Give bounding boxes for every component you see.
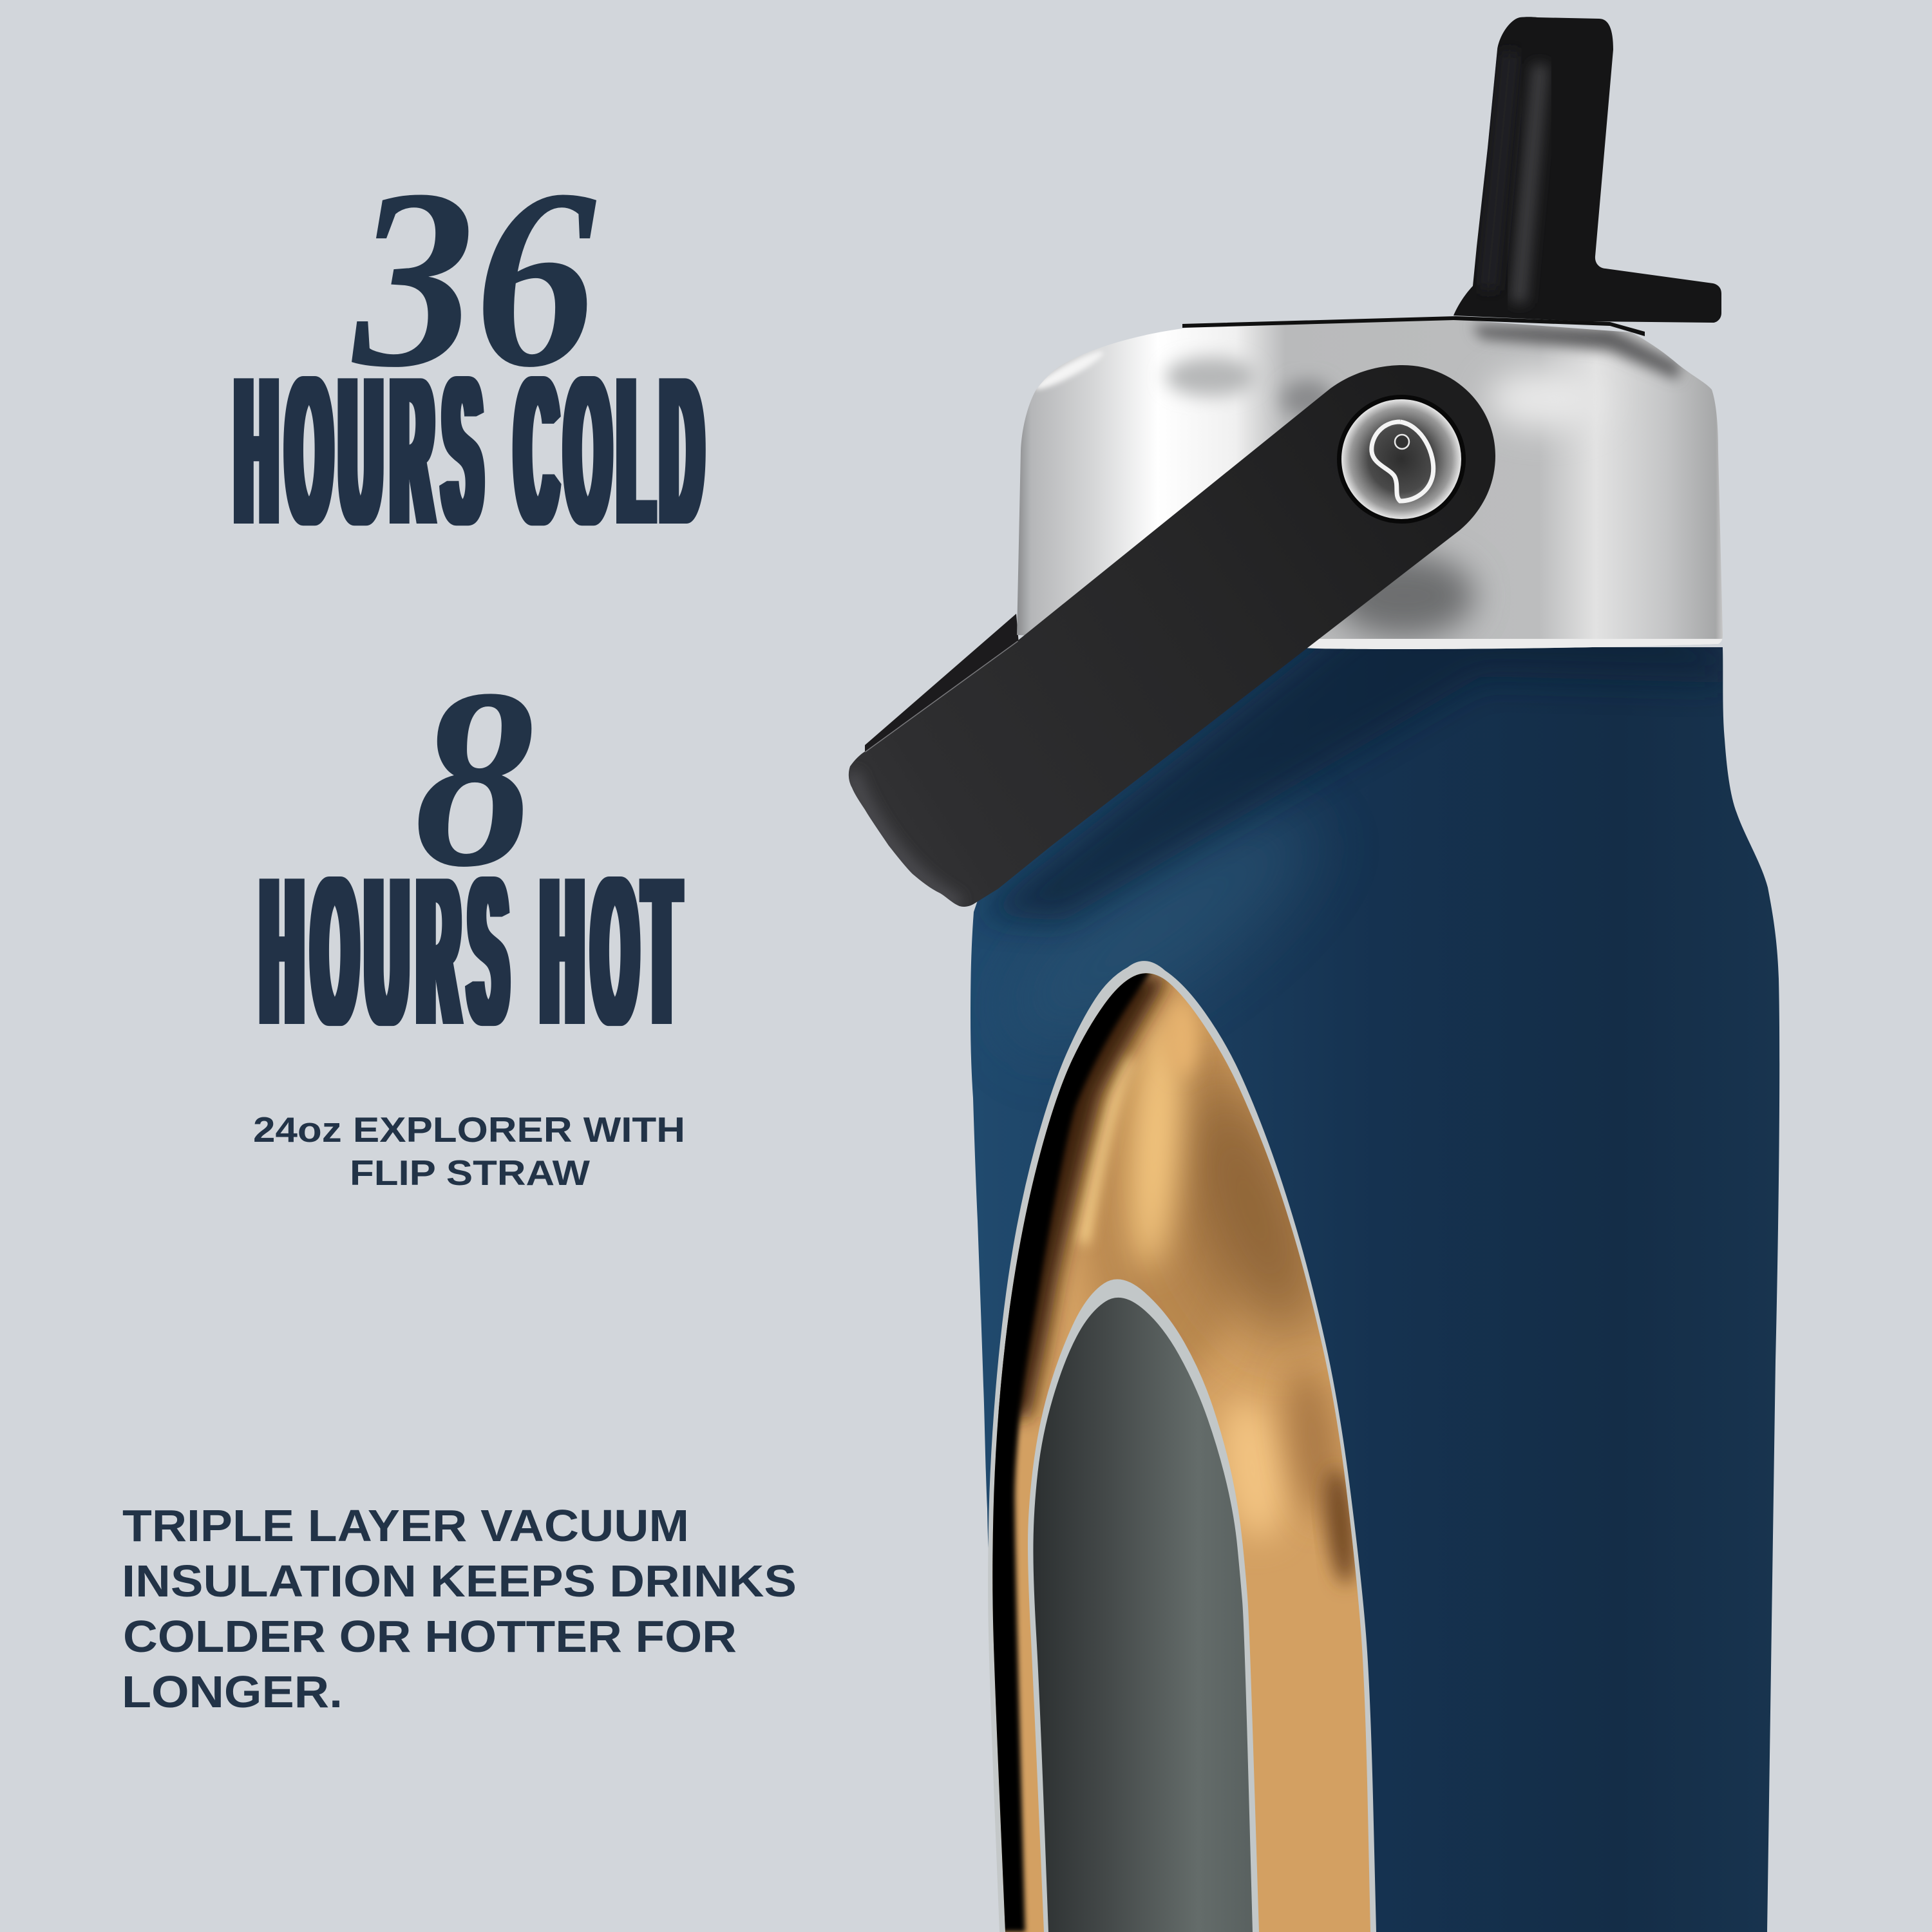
lid top edge [1182,316,1645,336]
handle back loop [865,614,1019,753]
text block: insulation description: TRIPLE LAYER VACUUM [122,1501,689,1551]
strap handle [849,365,1495,907]
text block: insulation description: COLDER OR HOTTER FOR [123,1611,737,1662]
cutaway: inner silver layer [1028,1279,1259,1932]
flip straw [1454,17,1721,323]
label: hours cold: HOURS COLD [236,333,702,569]
cutaway: inner steel chamber [1033,1298,1253,1932]
steel cap [1017,319,1726,649]
number 36: 36 [350,137,596,421]
text block: product name: 24oz EXPLORER WITH [253,1110,685,1150]
black shadow crescent [992,973,1153,1932]
bottle illustration [849,17,1803,1932]
number 8: 8 [414,636,535,920]
text block: product name: FLIP STRAW [350,1153,590,1193]
text block: insulation description: INSULATION KEEPS DRINKS [122,1556,797,1606]
cutaway: copper layer [992,973,1370,1932]
heading: 36 hours cold [236,137,702,569]
heading: 8 hours hot [261,636,679,1069]
strap rivet button with logo [1337,395,1466,524]
text block: product name [253,1110,685,1193]
text block: insulation description: LONGER. [122,1667,343,1717]
bottle body [971,647,1780,1932]
label: hours hot: HOURS HOT [261,833,679,1069]
text block: insulation description [122,1501,797,1717]
brown shadow transition [998,973,1177,1431]
cutaway: outer silver layer [988,961,1376,1932]
